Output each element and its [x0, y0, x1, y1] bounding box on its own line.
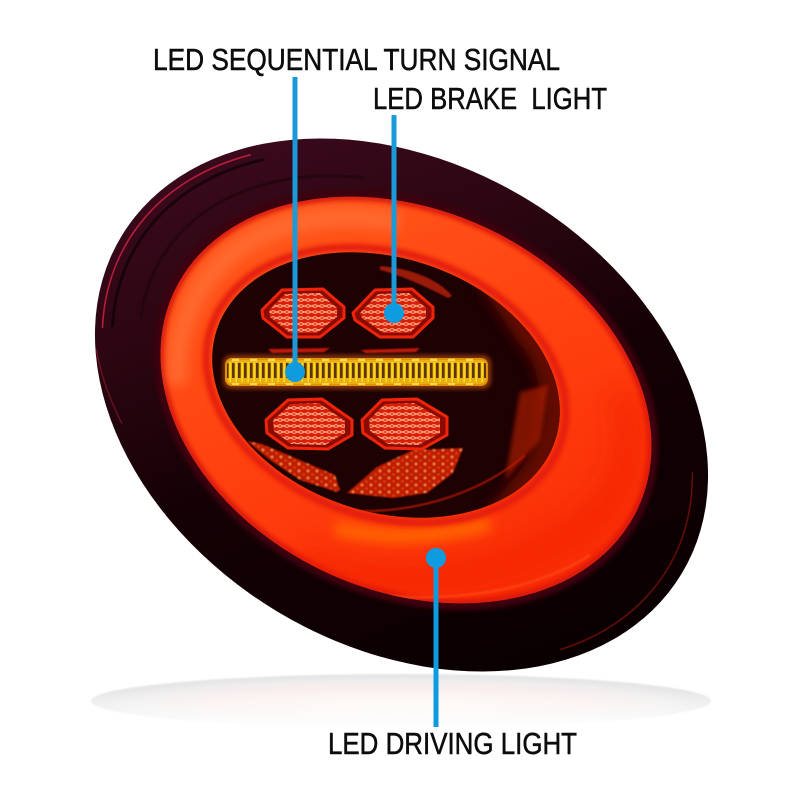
callout: brake light	[373, 81, 607, 323]
upper small reflection left	[268, 348, 330, 353]
lower right reflector	[347, 448, 463, 498]
housing rim highlights	[46, 91, 759, 703]
sequential turn signal bar	[223, 355, 491, 389]
label: LED SEQUENTIAL TURN SIGNAL	[153, 42, 560, 77]
label: LED BRAKE LIGHT	[373, 81, 607, 116]
callout: turn signal	[153, 42, 560, 382]
inner lamp cavity	[177, 209, 595, 561]
brake lamp: top right	[353, 289, 433, 337]
ground shadow	[85, 674, 717, 733]
lower edge highlight	[388, 554, 590, 599]
marker dot	[426, 548, 446, 568]
infographic: LED tail light diagram	[91, 48, 711, 754]
leader line	[292, 77, 298, 372]
marker dot	[384, 303, 404, 323]
label: LED DRIVING LIGHT	[328, 726, 577, 761]
lower orange glow	[335, 524, 490, 536]
upper bright band	[177, 217, 400, 385]
brake lamp: top left	[262, 289, 344, 337]
outer edge shading	[160, 196, 652, 604]
brake lamp: bottom left	[266, 399, 352, 449]
leader line	[434, 558, 438, 727]
cavity reflections	[246, 265, 560, 513]
lower left reflector	[247, 441, 340, 492]
callout: driving light	[328, 548, 577, 761]
brake lamp: bottom right	[362, 399, 447, 449]
marker dot	[285, 362, 305, 382]
inner edge red shade	[200, 241, 572, 529]
leader line	[392, 115, 396, 313]
driving light ring	[160, 196, 652, 604]
lower right red band	[300, 395, 629, 579]
dark halo around ring	[84, 110, 728, 690]
upper small reflection right	[360, 348, 420, 353]
tail light	[94, 138, 708, 672]
